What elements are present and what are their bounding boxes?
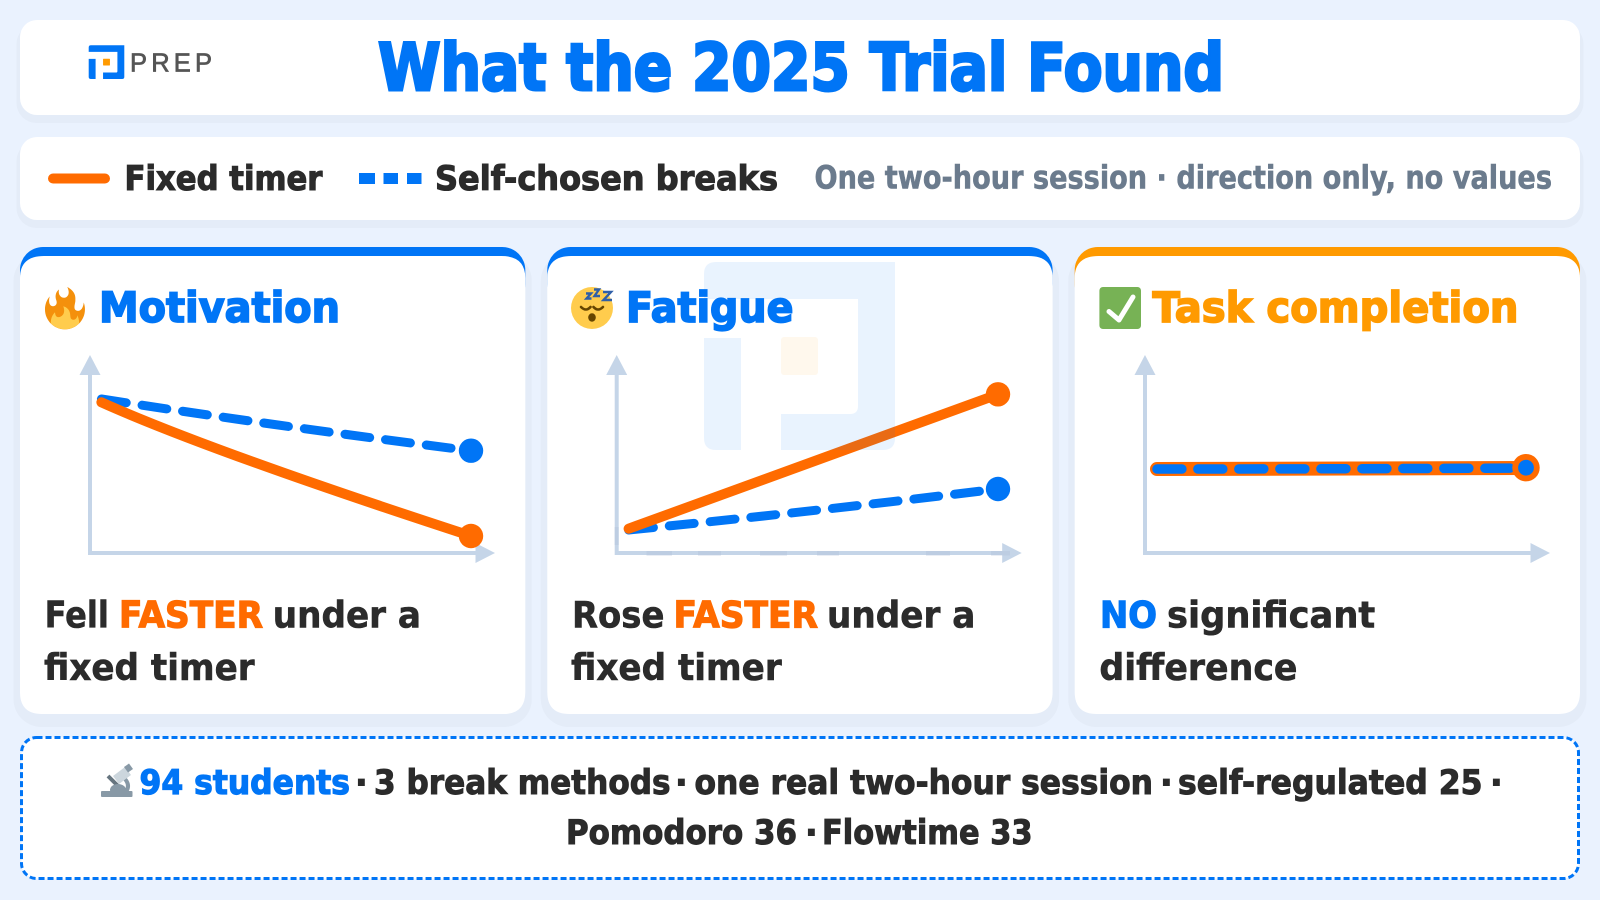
- finding text: motivation: [44, 594, 421, 689]
- finding text: task completion: NO: [1100, 594, 1157, 637]
- finding text: motivation: Fell: [45, 594, 109, 637]
- panel: task completion: [1068, 247, 1586, 727]
- legend panel: [16, 137, 1584, 228]
- study text line two: Flowtime 33: [822, 813, 1033, 852]
- stat: 94 students: 94 students: [140, 763, 350, 802]
- study text line two: Pomodoro 36: [566, 813, 797, 852]
- finding text: fatigue: FASTER: [674, 594, 818, 637]
- legend: self-chosen breaks: Self-chosen breaks: [435, 159, 778, 198]
- finding text: task completion: significant: [1167, 594, 1375, 637]
- header panel: [16, 20, 1584, 123]
- finding text: motivation: fixed timer: [44, 646, 255, 689]
- finding text: fatigue: under a: [827, 594, 975, 637]
- logo: PREP: PREP: [130, 50, 212, 78]
- finding text: fatigue: fixed timer: [571, 646, 782, 689]
- study text line one: ·: [1160, 763, 1173, 802]
- finding text: motivation: under a: [273, 594, 421, 637]
- watermark logo: [704, 262, 895, 450]
- finding text: task completion: [1099, 594, 1375, 689]
- finding text: task completion: difference: [1099, 646, 1298, 689]
- panel: fatigue: [541, 247, 1059, 727]
- icon: microscope: [101, 764, 133, 797]
- title: What the 2025 Trial Found: [378, 31, 1224, 106]
- legend: fixed timer: Fixed timer: [124, 159, 323, 198]
- study text line one: ·: [1490, 763, 1503, 802]
- finding text: fatigue: Rose: [572, 594, 664, 637]
- chart: motivation lines: [80, 355, 495, 563]
- icon: sleeping face: [571, 287, 613, 329]
- heading: task completion: Task completion: [1152, 283, 1518, 332]
- callout: study details: [22, 738, 1578, 878]
- study text line one: 3 break methods: [374, 763, 670, 802]
- study text line two: [566, 813, 1033, 852]
- panel: motivation: [14, 247, 532, 727]
- study text line one: ·: [355, 763, 368, 802]
- icon: check mark: [1099, 287, 1141, 329]
- study text line one: [355, 763, 1503, 802]
- finding text: fatigue: [571, 594, 975, 689]
- study text line one: self-regulated 25: [1178, 763, 1483, 802]
- study text line one: ·: [675, 763, 688, 802]
- chart: fatigue lines: [606, 355, 1022, 563]
- chart: task completion lines: [1134, 355, 1550, 563]
- icon: fire: [45, 287, 85, 329]
- heading: motivation: Motivation: [99, 283, 340, 332]
- finding text: motivation: FASTER: [119, 594, 263, 637]
- study text line two: ·: [805, 813, 818, 852]
- logo: PREP: [89, 45, 212, 79]
- heading: fatigue: Fatigue: [626, 283, 794, 332]
- study text line one: one real two-hour session: [694, 763, 1153, 802]
